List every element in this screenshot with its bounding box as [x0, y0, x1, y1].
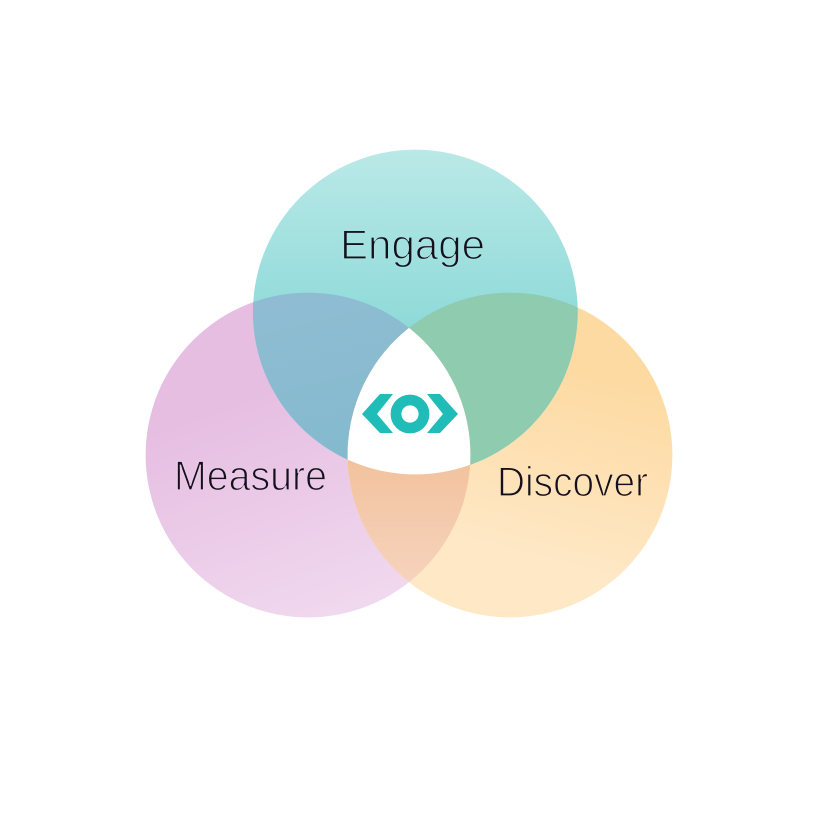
- overlap: engage and measure: [252, 292, 409, 460]
- panel: measure circle: [146, 293, 470, 617]
- panel: discover circle: [348, 293, 672, 617]
- label: Engage: Engage: [340, 221, 485, 268]
- label: Discover: Discover: [497, 458, 648, 505]
- panel: engage circle: [253, 150, 578, 474]
- icon: eye logo: [362, 394, 458, 433]
- label: Measure: Measure: [174, 452, 327, 499]
- overlap: engage and discover: [409, 292, 578, 465]
- overlap: measure and discover: [348, 328, 470, 582]
- center: white intersection: [348, 328, 470, 474]
- venn diagram: [146, 150, 672, 618]
